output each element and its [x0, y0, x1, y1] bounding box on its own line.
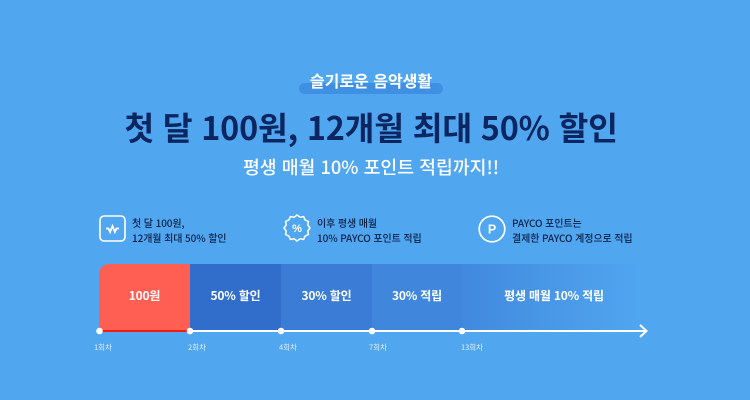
label: 30% discount: 30% 할인 [302, 287, 351, 304]
step: 100 won [99, 264, 190, 331]
step: lifetime 10% points [462, 264, 642, 331]
label: 100 won: 100원 [129, 287, 160, 304]
label: lifetime 10% points: 평생 매월 10% 적립 [504, 287, 604, 304]
benefit text: lifetime points: 10% PAYCO 포인트 적립 [317, 230, 422, 245]
icon: percent badge: % [292, 223, 302, 235]
step: 30% discount [281, 264, 372, 331]
benefit text: lifetime points [317, 215, 422, 245]
benefit text: lifetime points: 이후 평생 매월 [317, 215, 377, 230]
label: 30% points: 30% 적립 [392, 287, 442, 304]
tag highlight bar [299, 83, 443, 94]
tick: round 4: 4회차 [279, 342, 297, 353]
benefit text: PAYCO points: PAYCO 포인트는 [512, 215, 582, 230]
benefit text: first month: 첫 달 100원, [132, 215, 184, 230]
tag heading: 슬기로운 음악생활 [310, 68, 432, 92]
icon: P circle [478, 215, 506, 243]
benefit text: first month [132, 215, 226, 245]
benefit text: PAYCO points [512, 215, 632, 245]
subtitle: 평생 매월 10% 포인트 적립까지!! [243, 154, 499, 180]
icon: percent badge [283, 214, 311, 242]
benefit text: first month: 12개월 최대 50% 할인 [132, 230, 226, 245]
tick: round 1: 1회차 [94, 342, 112, 353]
timeline arrow [96, 324, 648, 338]
benefit text: PAYCO points: 결제한 PAYCO 계정으로 적립 [512, 230, 632, 245]
icon: P circle: P [488, 222, 496, 236]
label: 50% discount: 50% 할인 [211, 287, 260, 304]
icon: won card [99, 215, 126, 242]
tick: round 2: 2회차 [188, 342, 206, 353]
tick: round 7: 7회차 [369, 342, 387, 353]
step: 30% points [372, 264, 462, 331]
step: 50% discount [190, 264, 281, 331]
main title: 첫 달 100원, 12개월 최대 50% 할인 [124, 103, 618, 150]
tick: round 13: 13회차 [461, 342, 483, 353]
